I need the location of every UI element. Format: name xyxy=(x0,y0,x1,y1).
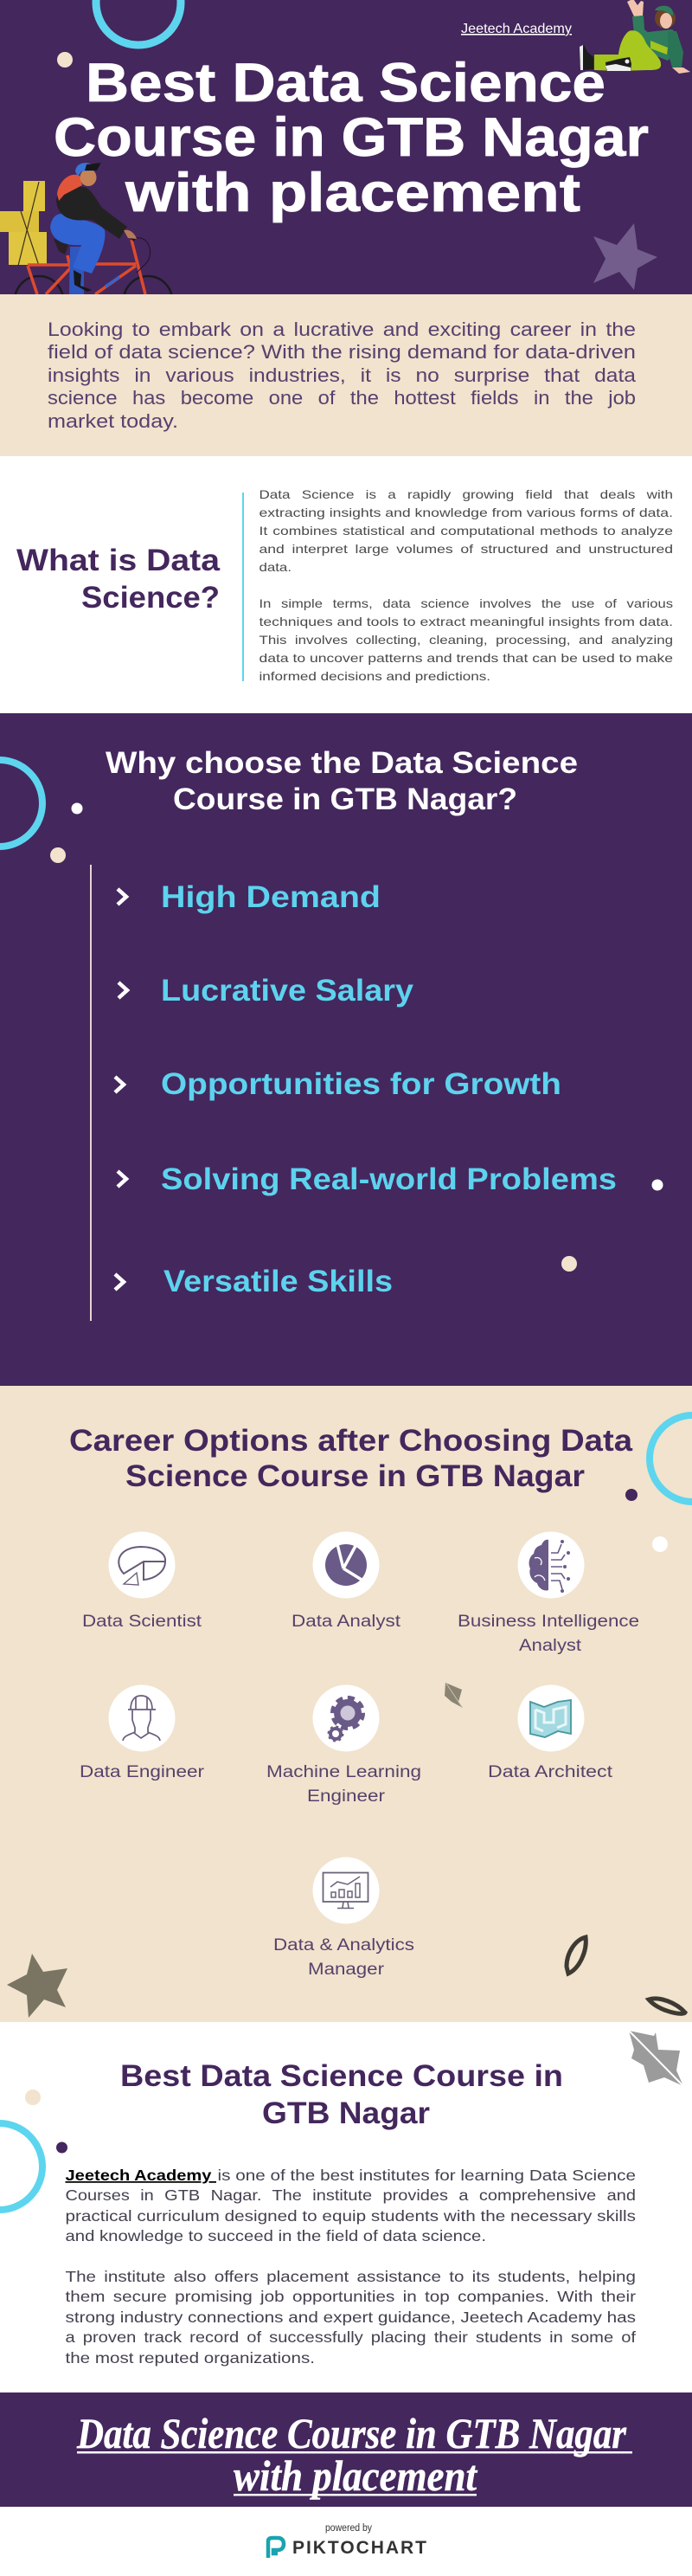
career: Business Intelligence Analyst: Business Intelligence xyxy=(458,1613,639,1631)
heading: Science Course in GTB Nagar xyxy=(125,1459,585,1493)
brand link: Jeetech Academy xyxy=(461,22,572,36)
heading: Course in GTB Nagar? xyxy=(173,782,517,816)
body text: strong industry connections and expert guidance, Jeetech Academy has xyxy=(66,2309,636,2326)
heading xyxy=(16,544,221,615)
main title: with placement xyxy=(125,163,580,223)
heading: GTB Nagar xyxy=(262,2096,430,2130)
career: Data Engineer xyxy=(80,1684,205,1781)
heading xyxy=(120,2059,563,2130)
decorative leaf outlines xyxy=(567,1937,685,2013)
heading: Best Data Science Course in xyxy=(120,2059,563,2093)
decorative ring and dots xyxy=(625,1415,692,1552)
panel: introduction: field of data science? With the rising demand for data-driven xyxy=(48,341,636,363)
heading: Why choose the Data Science xyxy=(106,746,578,780)
item: Lucrative Salary: Lucrative Salary xyxy=(161,974,414,1008)
panel: introduction: insights in various industries, it is no surprise that data xyxy=(48,364,637,386)
definition text: data to uncover patterns and trends that can be used to make xyxy=(260,651,673,665)
career: Machine Learning Engineer: Machine Learning xyxy=(266,1763,421,1781)
definition text: and interpret large volumes of structured and unstructured xyxy=(260,542,673,556)
illustration: sitting person xyxy=(580,0,690,74)
panel: career options xyxy=(0,1386,692,2022)
definition text: informed decisions and predictions. xyxy=(260,669,490,683)
panel: footer banner: with placement xyxy=(234,2451,478,2500)
decorative kite leaf xyxy=(445,1683,463,1708)
decorative star xyxy=(593,223,657,290)
panel: introduction: science has become one of the hottest fields in the job xyxy=(48,387,636,409)
panel: footer banner xyxy=(0,2392,692,2507)
panel: introduction: Looking to embark on a lucrative and exciting career in the xyxy=(48,319,636,340)
main title: Course in GTB Nagar xyxy=(54,107,649,168)
body text: them secure promising job opportunities in top companies. With their xyxy=(66,2288,636,2305)
decorative star xyxy=(7,1954,67,2018)
body text: practical curriculum designed to equip students with the necessary skills xyxy=(66,2207,636,2225)
heading: Science? xyxy=(81,581,220,615)
decorative cyan ring xyxy=(96,0,181,45)
career: Data Scientist xyxy=(82,1532,202,1631)
main title: Best Data Science xyxy=(86,53,606,113)
career: Business Intelligence Analyst xyxy=(458,1532,639,1655)
powered by credit: powered by xyxy=(325,2523,372,2534)
body text: a proven track record of successfully placing their students in some of xyxy=(66,2328,636,2346)
career: Business Intelligence Analyst: Analyst xyxy=(519,1637,582,1655)
definition text: It combines statistical and computational methods to analyze xyxy=(260,524,673,538)
heading: What is Data xyxy=(16,544,221,577)
definition text: This involves collecting, cleaning, processing, and analyzing xyxy=(260,633,673,647)
body text: The institute also offers placement assistance to its students, helping xyxy=(66,2268,636,2285)
career: Data Engineer: Data Engineer xyxy=(80,1763,205,1781)
career: Data and Analytics Manager: Manager xyxy=(308,1961,385,1979)
item: Versatile Skills: Versatile Skills xyxy=(163,1265,393,1298)
definition text: data. xyxy=(260,560,292,574)
heading xyxy=(69,1424,633,1493)
item: Opportunities for Growth: Opportunities for Growth xyxy=(161,1067,561,1101)
career: Machine Learning Engineer: Engineer xyxy=(307,1787,386,1806)
decorative beige dot xyxy=(57,52,73,68)
heading xyxy=(106,746,578,816)
item: Solving Real-world Problems: Solving Real-world Problems xyxy=(161,1162,617,1196)
panel: introduction xyxy=(0,294,692,456)
body text: is one of the best institutes for learning Data Science xyxy=(218,2167,636,2184)
icon: piktochart logo xyxy=(268,2538,284,2558)
body text xyxy=(66,2167,636,2367)
definition text xyxy=(260,487,673,683)
definition text: extracting insights and knowledge from various forms of data. xyxy=(260,506,673,519)
decorative holly leaf xyxy=(629,2031,683,2086)
vertical rule xyxy=(90,865,92,1321)
decorative ring and dots xyxy=(0,760,663,1272)
powered by credit: PIKTOCHART xyxy=(292,2538,426,2558)
body text: and knowledge to succeed in the field of data science. xyxy=(66,2227,486,2244)
career: Data Architect: Data Architect xyxy=(488,1763,613,1781)
panel: why choose xyxy=(0,713,692,1386)
heading: Career Options after Choosing Data xyxy=(69,1424,633,1458)
main title xyxy=(54,53,649,223)
panel: what is data science xyxy=(0,456,692,713)
body text: Courses in GTB Nagar. The institute provides a comprehensive and xyxy=(66,2186,636,2204)
career: Data Analyst xyxy=(292,1532,401,1631)
body text: Jeetech Academy xyxy=(66,2167,216,2184)
definition text: In simple terms, data science involves the use of various xyxy=(260,596,673,610)
item: High Demand: High Demand xyxy=(161,880,381,914)
career: Data and Analytics Manager xyxy=(273,1858,414,1979)
career: Machine Learning Engineer xyxy=(266,1684,421,1806)
cyan divider xyxy=(242,493,244,681)
definition text: Data Science is a rapidly growing field that deals with xyxy=(260,487,673,501)
career: Data and Analytics Manager: Data & Analytics xyxy=(273,1936,414,1955)
panel: introduction: market today. xyxy=(48,410,178,432)
panel: best course xyxy=(0,2022,692,2392)
decorative ring and dots xyxy=(0,2090,67,2210)
career: Data Scientist: Data Scientist xyxy=(82,1613,202,1631)
powered by credit xyxy=(268,2523,426,2558)
career: Data Architect xyxy=(488,1684,613,1781)
body text: the most reputed organizations. xyxy=(66,2349,315,2367)
illustration: delivery cyclist xyxy=(0,163,173,294)
career: Data Analyst: Data Analyst xyxy=(292,1613,401,1631)
panel: hero header xyxy=(0,0,692,325)
definition text: techniques and tools to extract meaningful insights from data. xyxy=(260,615,673,628)
